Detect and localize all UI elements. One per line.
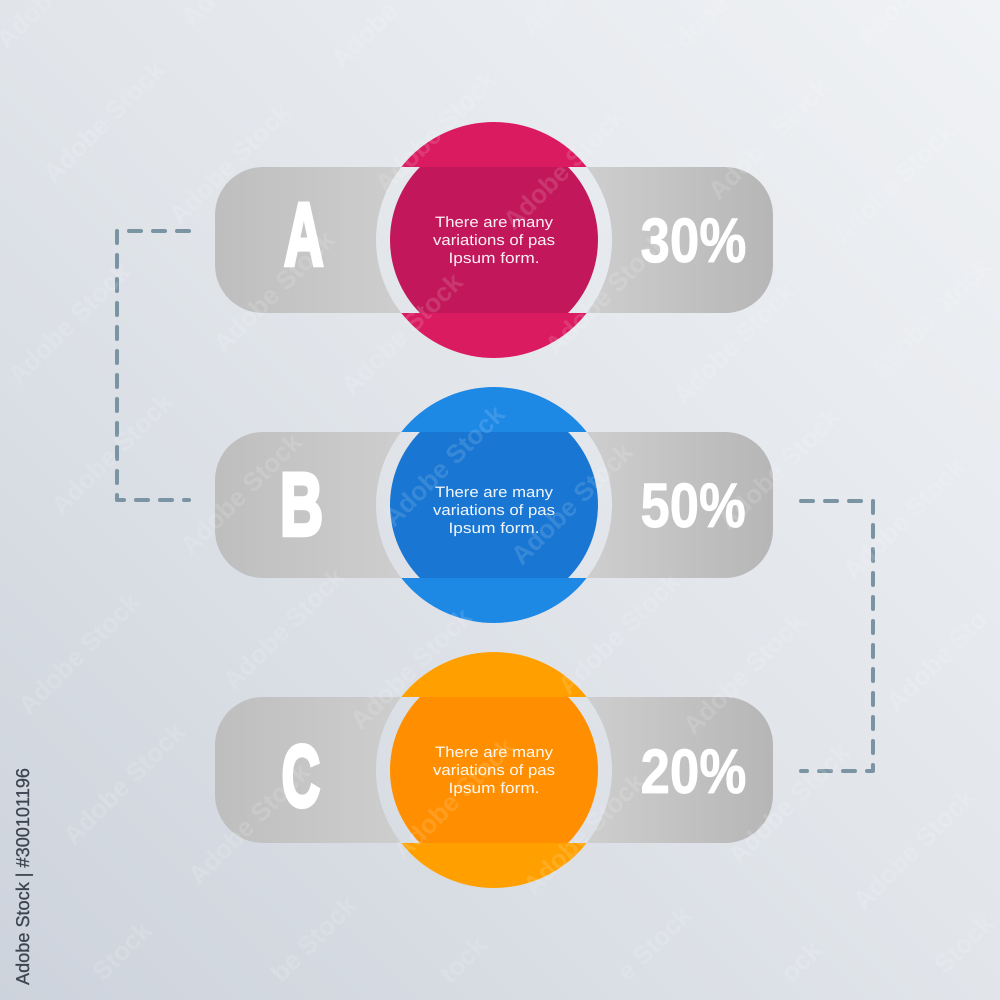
watermark pattern: Adobe Stock [174,426,308,560]
row B bar [215,432,773,578]
row B percentage: 50% [640,471,746,541]
row B inner circle [390,432,598,578]
row B letter: B [280,454,323,554]
watermark pattern: Stock [928,908,1000,979]
row C description: There are many [435,744,554,761]
watermark pattern: Adobe Stock [552,566,686,700]
stock id vertical label: Adobe Stock | #300101196 [12,768,33,985]
row A circle caps [401,122,587,358]
watermark pattern: Adobe Stock [344,601,478,735]
connector: B to C dashed line [801,501,873,771]
watermark pattern: tock [433,930,493,989]
watermark pattern: Adobe Sto [880,604,993,717]
watermark pattern: Adobe Stock [667,276,801,410]
panel: row B [215,387,773,623]
watermark pattern: Adobe Stock [505,436,639,570]
row A inner circle [390,167,598,313]
row A letter: A [284,184,323,284]
watermark pattern: Adobe Stock [847,781,981,915]
watermark pattern: Adobe Stock [57,716,191,850]
row A percentage: 30% [640,206,746,276]
watermark pattern: Stock [86,915,158,986]
watermark pattern: e Stock [611,900,698,987]
row B description: Ipsum form. [448,520,540,537]
row A bar [215,167,773,313]
watermark pattern: Adobe Stock [369,64,503,198]
row C letter: C [282,728,320,825]
watermark pattern: Adobe Stock [497,101,631,235]
watermark pattern: Adobe Stock [677,606,811,740]
watermark pattern: Adobe Stock [722,736,856,870]
watermark pattern: Adobe Stock [702,71,836,205]
watermark pattern: Adobe Stock [37,54,171,188]
row C description: Ipsum form. [448,780,540,797]
watermark pattern: Adobe Stock [377,398,511,532]
row B description: There are many [435,484,554,501]
watermark pattern: Adobe Stock [539,226,673,360]
watermark pattern: Adobe Stock [207,224,341,358]
watermark pattern: Adobe Stock [387,731,521,865]
row C inner circle [390,697,598,843]
panel: row A [215,122,773,358]
watermark pattern: Adobe Stock [863,251,997,385]
row C circle caps [401,652,587,888]
watermark pattern: Adobe Stock [217,561,351,695]
watermark pattern: be Stock [264,890,363,988]
watermark pattern: Adobe Stock [335,266,469,400]
row C description: variations of pas [433,762,555,779]
panel: row C [215,652,773,888]
watermark pattern: Adobe Stock [837,451,971,585]
connector: A to B dashed line [117,231,189,500]
row B circle caps [401,387,587,623]
row A description: Ipsum form. [448,250,540,267]
watermark pattern: Adobe Stock [12,586,146,720]
watermark pattern: Adobe Stock [45,386,179,520]
row B description: variations of pas [433,502,555,519]
watermark pattern: Adobe Stock [182,756,316,890]
watermark pattern: Adobe Stock [2,256,136,390]
watermark pattern: Adobe Stock [712,401,846,535]
watermark pattern: Adobe Stock [517,766,651,900]
row A description: variations of pas [433,232,555,249]
row C percentage: 20% [640,737,746,807]
row C bar [215,697,773,843]
watermark pattern: Adobe Stock [163,96,297,230]
row A description: There are many [435,214,554,231]
watermark pattern: ock [774,935,828,988]
watermark pattern: Adobe Stock [827,116,961,250]
